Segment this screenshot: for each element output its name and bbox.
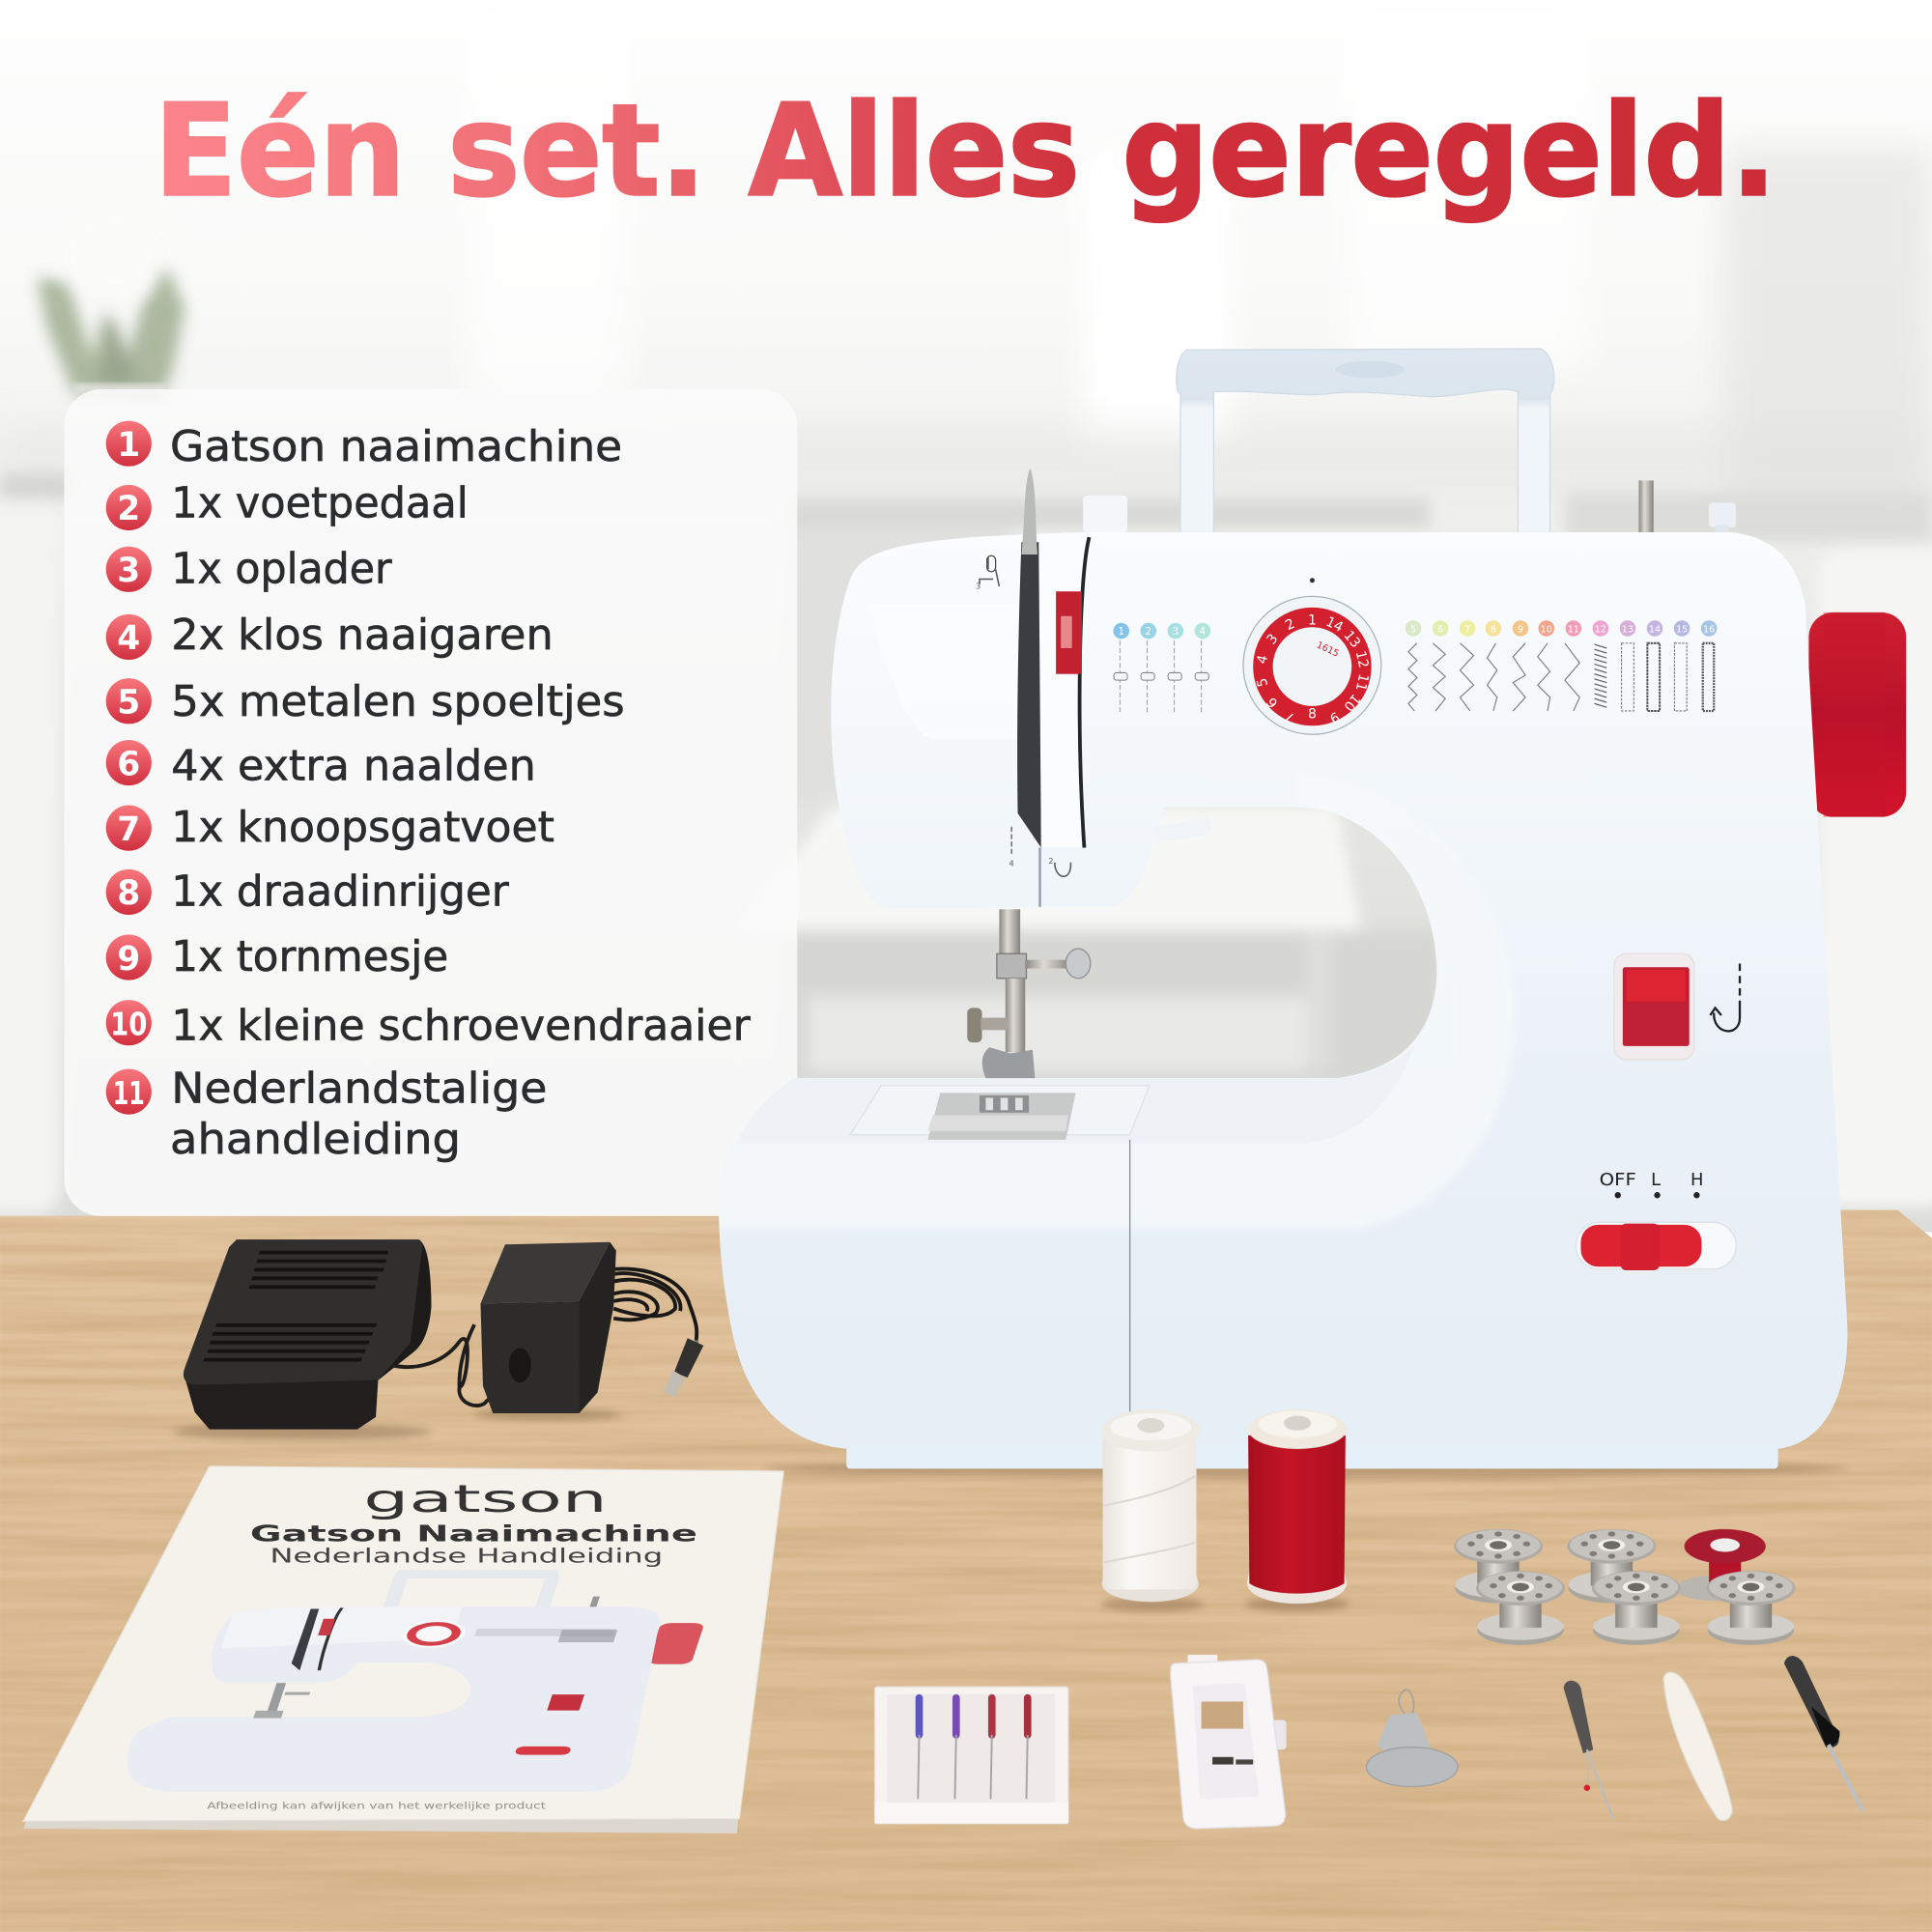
stitch selector dial: 11 xyxy=(1352,672,1371,693)
item 11 xyxy=(106,1065,547,1164)
manual machine illustration xyxy=(114,1570,723,1792)
manual booklet xyxy=(23,1466,783,1833)
stitch numbers 5-16 xyxy=(1406,620,1717,637)
shaded arch band xyxy=(719,1019,1509,1227)
item 3: 3 xyxy=(117,552,140,590)
needle box xyxy=(875,1687,1068,1824)
background: blurred living room xyxy=(0,0,1932,1233)
bobbin winder xyxy=(1153,817,1211,842)
item 4: 4 xyxy=(117,619,140,658)
head icons: 4 xyxy=(1009,860,1014,868)
stitch selector dial: 7 xyxy=(1283,708,1297,725)
stitch selector dial: 2 xyxy=(1283,616,1297,634)
bottom skirt xyxy=(846,1446,1778,1468)
item 10: 10 xyxy=(110,1005,147,1042)
item 1: 1 xyxy=(117,426,140,465)
item 2: 2 xyxy=(117,490,140,528)
item 7: 7 xyxy=(117,810,140,849)
plant in background xyxy=(37,210,185,401)
item 11: 11 xyxy=(113,1074,145,1112)
stitch numbers 5-16: 8 xyxy=(1491,624,1496,635)
item 4: 2x klos naaigaren xyxy=(171,611,554,660)
item 6: 4x extra naalden xyxy=(171,742,536,790)
buttonhole foot xyxy=(1171,1655,1287,1829)
item 9: 1x tornmesje xyxy=(171,933,448,981)
stitch selector dial: 12 xyxy=(1352,649,1371,669)
base top surface xyxy=(737,1045,1414,1144)
speed slider xyxy=(1576,1222,1736,1270)
head highlight xyxy=(867,604,1020,739)
stitch selector dial: 4 xyxy=(1255,654,1271,666)
sewing machine xyxy=(690,349,1906,1479)
manual title: Gatson Naaimachine xyxy=(250,1522,697,1548)
stitch selector dial: 1 xyxy=(1308,613,1317,629)
title: Eén set. Alles geregeld. xyxy=(154,77,1776,225)
head icons: 3 xyxy=(976,582,980,591)
stitch numbers 5-16: 10 xyxy=(1541,624,1552,635)
tension numbers 1-4: 3 xyxy=(1173,627,1179,638)
stitch numbers 5-16: 16 xyxy=(1703,624,1715,635)
item 8: 1x draadinrijger xyxy=(171,868,509,917)
item 7: 1x knoopsgatvoet xyxy=(171,804,554,852)
seam ripper cover xyxy=(1663,1672,1732,1821)
base seam xyxy=(1129,1140,1131,1449)
head icons xyxy=(976,555,1070,876)
stitch patterns xyxy=(1408,643,1714,711)
thread slots xyxy=(1017,469,1090,907)
item 2: 1x voetpedaal xyxy=(171,480,469,528)
white thread spool xyxy=(1100,1409,1204,1611)
stitch selector dial: 6 xyxy=(1264,694,1281,711)
red thread spool xyxy=(1246,1409,1350,1611)
stitch selector dial: 9 xyxy=(1327,708,1342,725)
item 9: 9 xyxy=(117,940,140,979)
metal bobbins xyxy=(1454,1529,1795,1645)
stitch selector dial xyxy=(1243,578,1381,734)
stitch numbers 5-16: 7 xyxy=(1464,624,1470,635)
item 10: 1x kleine schroevendraaier xyxy=(171,1003,751,1051)
stitch numbers 5-16: 13 xyxy=(1622,624,1634,635)
manual footnote: Afbeelding kan afwijken van het werkelijke product xyxy=(207,1801,546,1811)
stitch selector dial: 3 xyxy=(1264,632,1281,648)
item 5: 5x metalen spoeltjes xyxy=(171,678,625,726)
needle plate xyxy=(927,1093,1076,1140)
speed labels: OFF xyxy=(1600,1170,1636,1190)
panel: contents list xyxy=(64,389,797,1216)
item 11: Nederlandstalige xyxy=(171,1065,547,1114)
item 6: 6 xyxy=(117,745,140,783)
item 5: 5 xyxy=(117,684,140,723)
tension numbers 1-4: 4 xyxy=(1200,627,1206,638)
reverse stitch icon xyxy=(1710,963,1740,1031)
tension numbers 1-4: 2 xyxy=(1146,627,1151,638)
stitch numbers 5-16: 6 xyxy=(1437,624,1443,635)
head icons: 2 xyxy=(1048,857,1053,866)
foot pedal xyxy=(173,1239,431,1440)
seam ripper xyxy=(1564,1681,1613,1819)
manual logo: gatson xyxy=(363,1477,608,1521)
top pins xyxy=(1083,480,1736,545)
stitch selector dial: 1615 xyxy=(1315,639,1341,660)
needle assembly xyxy=(967,909,1091,1078)
tension numbers 1-4 xyxy=(1113,623,1210,712)
speed labels xyxy=(1600,1170,1703,1198)
stitch numbers 5-16: 9 xyxy=(1518,624,1523,635)
tension numbers 1-4: 1 xyxy=(1118,627,1124,638)
item 3: 1x oplader xyxy=(171,545,392,593)
stitch numbers 5-16: 12 xyxy=(1595,624,1606,635)
stitch numbers 5-16: 11 xyxy=(1568,624,1579,635)
reverse switch xyxy=(1614,953,1694,1060)
machine body xyxy=(719,532,1847,1449)
screwdriver xyxy=(1784,1656,1863,1811)
item 11: ahandleiding xyxy=(170,1116,461,1164)
hand wheel xyxy=(1808,612,1906,817)
speed labels: H xyxy=(1690,1170,1703,1190)
manual subtitle: Nederlandse Handleiding xyxy=(270,1544,663,1567)
speed labels: L xyxy=(1651,1170,1661,1190)
stitch numbers 5-16: 5 xyxy=(1410,624,1416,635)
stitch selector dial: 13 xyxy=(1341,628,1363,651)
item 8: 8 xyxy=(117,874,140,913)
tension indicator xyxy=(1056,591,1082,674)
item 1: Gatson naaimachine xyxy=(170,423,622,471)
stitch selector dial: 10 xyxy=(1341,691,1363,714)
carry handle xyxy=(1177,349,1554,549)
stitch selector dial: 8 xyxy=(1308,707,1317,723)
wooden table xyxy=(0,1208,1932,1932)
needle threader xyxy=(1367,1690,1458,1786)
stitch selector dial: 14 xyxy=(1323,614,1346,636)
stitch selector dial: 5 xyxy=(1255,676,1271,688)
power adapter with cables xyxy=(392,1242,703,1421)
stitch numbers 5-16: 14 xyxy=(1649,624,1661,635)
stitch numbers 5-16: 15 xyxy=(1676,624,1688,635)
